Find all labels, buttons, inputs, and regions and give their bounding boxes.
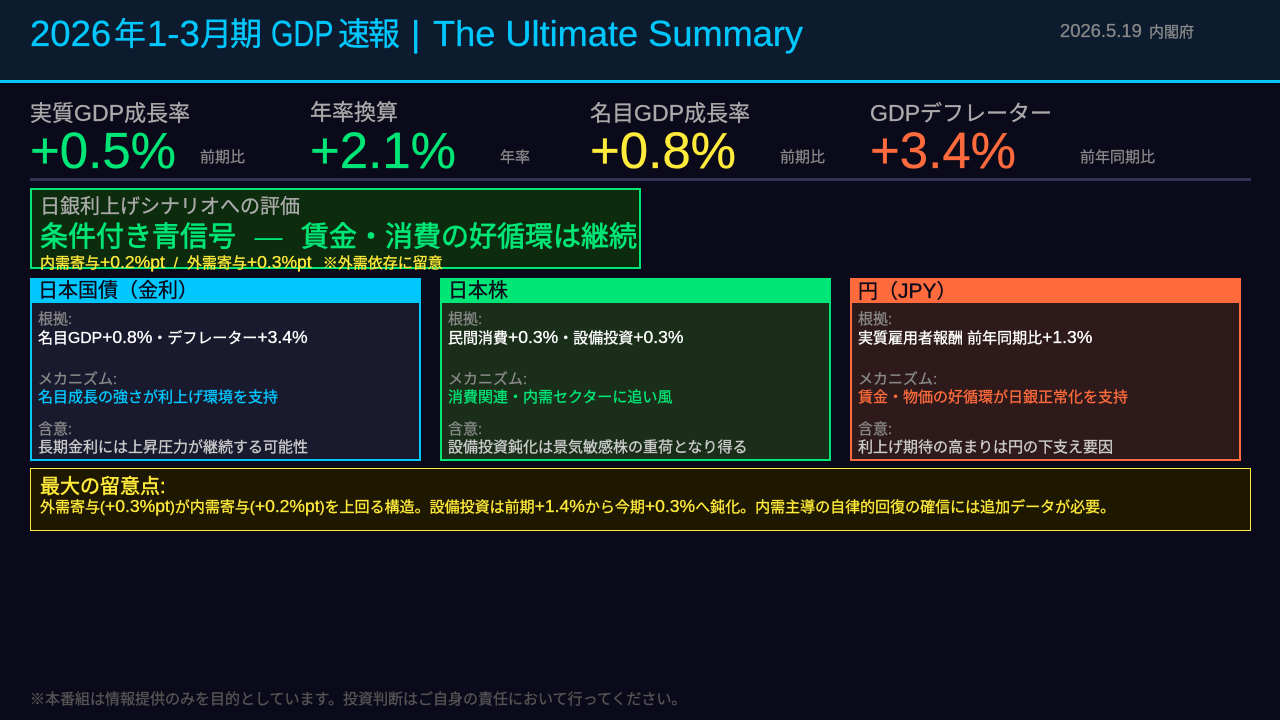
card body: 賃金・物価の好循環が日銀正常化を支持 xyxy=(858,389,1128,406)
contribution note: 内需寄与+0.2%pt 外需寄与+0.3%pt ※外需依存に留意 xyxy=(40,252,443,272)
card header xyxy=(850,278,1241,303)
contribution note: / xyxy=(174,255,178,272)
card body: 名目成長の強さが利上げ環境を支持 xyxy=(38,389,278,406)
panel: biggest caveat xyxy=(30,468,1251,531)
card: yen xyxy=(850,278,1241,461)
KPI: annualized: +2.1% xyxy=(310,122,456,179)
card body: 根拠: xyxy=(38,311,72,328)
caveat heading: 最大の留意点: xyxy=(40,476,166,498)
card body: 設備投資鈍化は景気敏感株の重荷となり得る xyxy=(448,439,748,456)
header band xyxy=(0,0,1280,83)
card body: 実質雇用者報酬 前年同期比+1.3% xyxy=(858,327,1092,347)
card body: 根拠: xyxy=(858,311,892,328)
card: JGB xyxy=(30,278,421,461)
KPI: annualized xyxy=(310,100,530,179)
title: | xyxy=(411,13,420,54)
panel label: 日銀利上げシナリオへの評価 xyxy=(40,196,300,218)
card body: 含意: xyxy=(858,421,892,438)
KPI: nominal GDP: 名目GDP成長率 xyxy=(590,100,750,126)
KPI: annualized: 年率 xyxy=(500,149,530,166)
KPI: nominal GDP xyxy=(590,100,825,179)
KPI: annualized: 年率換算 xyxy=(310,100,398,125)
title: 速報 xyxy=(338,16,398,52)
card header xyxy=(30,278,421,303)
footer disclaimer: ※本番組は情報提供のみを目的としています。投資判断はご自身の責任において行ってください。 xyxy=(30,691,686,708)
title: 年 xyxy=(114,16,146,52)
verdict: 条件付き青信号 賃金・消費の好循環は継続 xyxy=(40,221,637,252)
card body: 含意: xyxy=(38,421,72,438)
KPI: real GDP: +0.5% xyxy=(30,122,176,179)
card header: 日本株 xyxy=(448,280,508,302)
card body: メカニズム: xyxy=(858,371,937,388)
verdict: — xyxy=(255,221,283,252)
title: The Ultimate Summary xyxy=(433,13,803,54)
card header: 円（JPY） xyxy=(858,280,957,303)
KPI: deflator: 前年同期比 xyxy=(1080,149,1155,166)
KPI: real GDP xyxy=(30,100,245,179)
title: 1-3 xyxy=(147,13,200,54)
card body xyxy=(448,311,748,456)
title: 月期 xyxy=(200,16,260,52)
card: equities xyxy=(440,278,831,461)
KPI: deflator xyxy=(870,100,1155,179)
caveat body: 外需寄与(+0.3%pt)が内需寄与(+0.2%pt)を上回る構造。設備投資は前期+1.4%から今期+0.3%へ鈍化。内需主導の自律的回復の確信には追加データが必要。 xyxy=(40,496,1115,516)
card body: メカニズム: xyxy=(448,371,527,388)
title xyxy=(30,13,804,54)
KPI: deflator: +3.4% xyxy=(870,122,1016,179)
KPI: nominal GDP: +0.8% xyxy=(590,122,736,179)
KPI: nominal GDP: 前期比 xyxy=(780,149,825,166)
date and source: 2026.5.19 内閣府 xyxy=(1060,20,1194,41)
card body: 長期金利には上昇圧力が継続する可能性 xyxy=(38,439,308,456)
card body: 消費関連・内需セクターに追い風 xyxy=(448,389,672,406)
card body xyxy=(858,311,1128,456)
card body xyxy=(38,311,308,456)
panel: BOJ evaluation xyxy=(30,188,641,269)
title: GDP xyxy=(271,13,333,54)
KPI: real GDP: 実質GDP成長率 xyxy=(30,100,190,126)
title: 2026 xyxy=(30,13,111,54)
KPI: real GDP: 前期比 xyxy=(200,149,245,166)
card header: 日本国債（金利） xyxy=(38,280,198,302)
card body: メカニズム: xyxy=(38,371,117,388)
KPI: deflator: GDPデフレーター xyxy=(870,100,1052,126)
card body: 民間消費+0.3%・設備投資+0.3% xyxy=(448,327,683,347)
card header xyxy=(440,278,831,303)
card body: 根拠: xyxy=(448,311,482,328)
card body: 含意: xyxy=(448,421,482,438)
card body: 名目GDP+0.8%・デフレーター+3.4% xyxy=(38,327,308,347)
card body: 利上げ期待の高まりは円の下支え要因 xyxy=(858,439,1113,456)
